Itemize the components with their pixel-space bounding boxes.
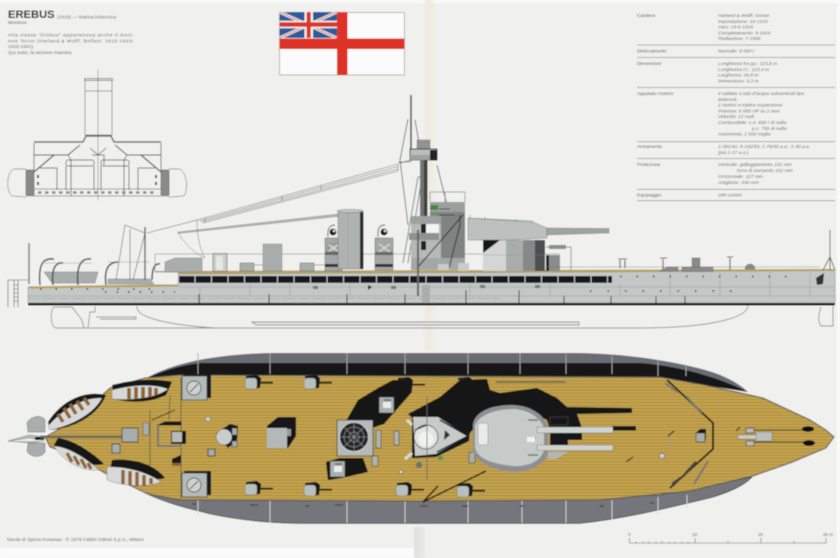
window band xyxy=(178,276,612,283)
bulkhead line xyxy=(150,378,181,498)
ladder leg xyxy=(403,177,422,263)
after superstructure xyxy=(165,244,325,272)
corner platforms xyxy=(182,374,211,497)
tripod foremast and director xyxy=(399,95,469,303)
stern centre gear xyxy=(40,410,215,466)
description: tore Terror (Harland & Wolff, Belfast: 1915-1916- xyxy=(8,38,134,44)
hatched side tanks xyxy=(26,170,169,195)
table rules xyxy=(637,45,835,201)
row: armamento: Armamento xyxy=(637,144,663,150)
row: armamento: 2-381/42, 8-102/50; 2-76/45 a.a.; 2-40 a.a. xyxy=(717,144,810,150)
boat 2 xyxy=(48,394,106,430)
waterline stripe xyxy=(28,303,835,306)
row: apparato motore: Autonomia: 1 500 miglia xyxy=(717,132,771,138)
anchor gear on forecastle xyxy=(738,426,815,446)
boat 4 xyxy=(107,460,165,486)
red cross xyxy=(280,12,404,75)
upper side hull xyxy=(143,353,748,392)
long deck cables xyxy=(496,381,566,383)
stern staff and ladder xyxy=(8,243,29,307)
mast and stays xyxy=(399,95,447,225)
small deck boxes xyxy=(372,430,403,474)
row: equipaggio: Equipaggio xyxy=(637,192,662,198)
small gun platform xyxy=(546,245,571,271)
row: dimensioni: Lunghezza fra pp.: 115,8 m xyxy=(718,61,777,67)
row: equipaggio xyxy=(637,192,743,198)
description: 1916-1941). xyxy=(8,44,34,50)
row: protezione: Orizzontale: 127 mm xyxy=(718,174,763,180)
credit line: Tavola di Spiros Koravias - © 1979 Fabbri Editori S.p.A., Milano xyxy=(6,536,144,543)
title: EREBUS xyxy=(8,9,55,21)
row: cantiere: Harland & Wolff, Govan xyxy=(718,13,770,19)
rubbing strakes xyxy=(199,290,685,304)
row: cantiere: Varo: 19-6-1916 xyxy=(718,25,753,31)
main derrick lines xyxy=(197,162,411,223)
forward breakwater xyxy=(665,380,713,488)
row: apparato motore: Babcock xyxy=(718,97,737,103)
bulges xyxy=(8,169,187,197)
stern fairleads xyxy=(8,416,45,456)
lower side hull xyxy=(145,477,752,524)
conning tower and bridge xyxy=(405,396,486,502)
upper deck and casing xyxy=(34,136,161,196)
plan view of the ship xyxy=(8,353,834,524)
row: apparato motore: Potenza: 6 000 HP su 2 assi xyxy=(718,108,780,114)
funnel shadow and cap xyxy=(216,424,238,448)
row: armamento: (poi 2-37 a.a.) xyxy=(718,150,749,156)
scale labels: 0 xyxy=(628,532,631,537)
secondary gun mounts xyxy=(245,375,485,497)
row: protezione: torre di comando 152 mm xyxy=(737,168,793,174)
underwater hull outline xyxy=(51,305,833,328)
trunk xyxy=(420,160,428,220)
title block xyxy=(8,9,134,56)
ship crest xyxy=(816,273,824,285)
scale labels: 30 m xyxy=(823,532,833,537)
row: armamento xyxy=(637,144,810,156)
row: apparato motore: Apparato motore xyxy=(637,91,674,97)
row: protezione: Artiglierie: 330 mm xyxy=(717,180,759,186)
hull xyxy=(28,270,835,303)
funnel xyxy=(84,78,112,135)
searchlight tower aft xyxy=(325,225,342,271)
main shadow xyxy=(408,379,632,440)
row: apparato motore: Velocità: 12 nodi xyxy=(718,114,755,120)
main turret xyxy=(473,405,548,472)
boat 1 xyxy=(112,380,172,402)
row: cantiere: Completamento: 9-1916 xyxy=(718,30,771,36)
specification table xyxy=(637,13,835,201)
aft mast xyxy=(116,220,197,280)
row: apparato motore: 4 caldaie a tubi d'acqua subverticali tipo xyxy=(718,91,805,97)
bridge block xyxy=(430,202,465,268)
long rail xyxy=(155,254,560,272)
row: apparato motore: 2 motrici a triplice espansione xyxy=(717,103,783,109)
row: dimensioni: Immersione: 3,3 m xyxy=(718,78,758,84)
row: protezione xyxy=(637,162,793,186)
row: protezione: Verticale: galleggiamento 152 mm xyxy=(718,162,792,168)
row: dimensioni: Dimensioni xyxy=(637,61,661,67)
description xyxy=(8,32,134,56)
midship cross-section drawing xyxy=(8,70,187,200)
ship type: Monitore xyxy=(8,20,27,26)
row: dimensioni: Lunghezza f.t.: 123,4 m xyxy=(718,67,769,73)
forward deck fittings xyxy=(626,427,740,462)
double bottom xyxy=(26,175,169,196)
wooden deck xyxy=(45,375,834,501)
scale labels xyxy=(628,532,833,537)
yellow deck strip xyxy=(28,269,835,288)
searchlight platforms xyxy=(330,396,395,477)
row: dislocamento: Normale: 8 000 t xyxy=(718,48,755,54)
union canton xyxy=(280,12,338,38)
row: dislocamento: Dislocamento xyxy=(637,48,667,54)
row: cantiere: Cantiere xyxy=(637,13,656,19)
description: Alla classe "Erebus" apparteneva anche il moni- xyxy=(8,32,134,38)
row: cantiere: Impostazione: 10-1915 xyxy=(718,19,768,25)
armour diagonals xyxy=(34,155,161,172)
row: apparato motore: Combustibile: c.n. 650 t di nafta xyxy=(718,120,787,126)
row: dimensioni xyxy=(637,61,777,84)
side elevation of the ship xyxy=(8,95,835,328)
row: protezione: Protezione xyxy=(637,162,661,168)
row: equipaggio: 288 uomini xyxy=(717,192,743,198)
row: dislocamento xyxy=(637,48,755,54)
funnel xyxy=(337,209,364,269)
subtitle: (1918) — Marina britannica xyxy=(57,14,117,20)
scale labels: 10 xyxy=(692,532,698,537)
description: Qui sotto, la sezione maestra. xyxy=(8,50,73,56)
main guns xyxy=(537,417,613,459)
shadows of the forward superstructure xyxy=(326,379,636,480)
searchlight tower forward xyxy=(375,225,393,270)
rangefinder grid platform xyxy=(337,420,373,456)
scale labels: 20 xyxy=(758,532,764,537)
forward deck fittings xyxy=(546,257,820,272)
portholes xyxy=(40,276,790,292)
flag: White Ensign xyxy=(280,12,404,75)
row: dimensioni: Larghezza: 26,8 m xyxy=(718,73,759,79)
main turret xyxy=(468,215,609,271)
bridge strut xyxy=(418,215,463,268)
boat 3 xyxy=(54,438,104,470)
scale bar xyxy=(628,532,833,543)
row: apparato motore xyxy=(637,91,805,138)
hull panel lines xyxy=(28,272,835,303)
jackstaff xyxy=(823,230,835,270)
gun house xyxy=(468,218,547,240)
fire control top xyxy=(410,140,437,160)
row: cantiere xyxy=(637,13,771,42)
deck house block xyxy=(267,417,296,448)
row: cantiere: Radiazione: 7-1946 xyxy=(718,36,761,42)
row: apparato motore: p.c. 750 di nafta xyxy=(751,126,787,132)
gun barrel xyxy=(547,228,609,235)
derrick boom xyxy=(178,214,338,258)
boats xyxy=(48,380,172,486)
aft boats and davits xyxy=(40,259,160,285)
barbette xyxy=(483,240,545,271)
